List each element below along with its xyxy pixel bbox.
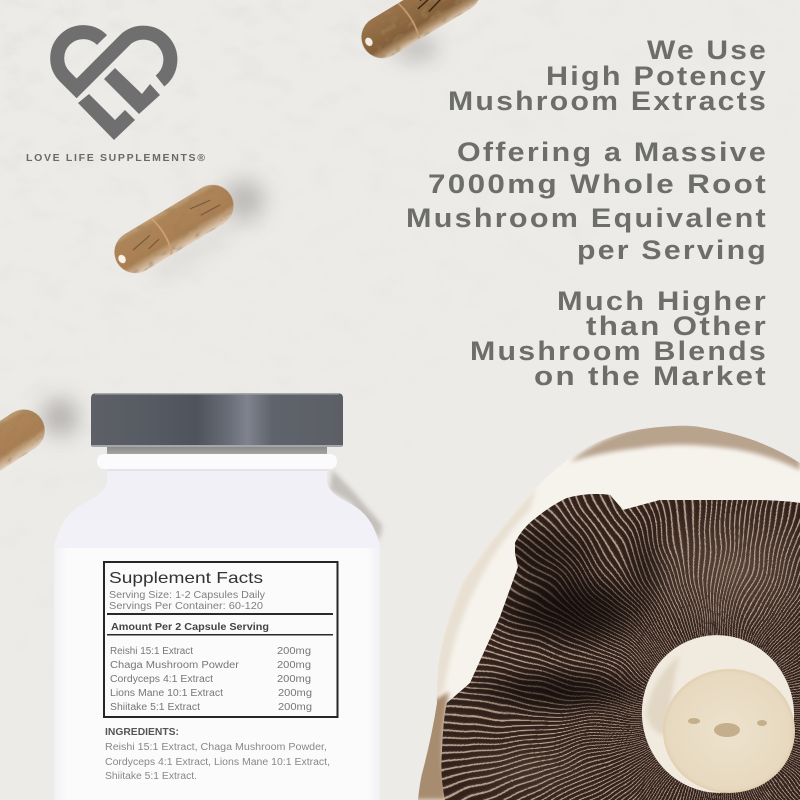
ingredient rows: Lions Mane 10:1 Extract [110,688,223,699]
text block: 7000mg equivalent: Mushroom Equivalent [406,203,768,233]
mushroom [418,426,800,800]
ingredients text: Reishi 15:1 Extract, Chaga Mushroom Powder, [105,742,327,753]
logo mark: heart [57,32,170,140]
text block: higher than others: Much Higher [557,286,768,316]
bottle label [54,548,380,800]
text block: higher than others: on the Market [534,361,768,391]
ingredient rows: 200mg [277,646,311,657]
ingredient rows: Shiitake 5:1 Extract [110,702,200,713]
ingredients text: Cordyceps 4:1 Extract, Lions Mane 10:1 Extract, [105,757,330,768]
ingredient rows: 200mg [278,688,312,699]
stem marks [688,718,767,737]
text block: 7000mg equivalent: Offering a Massive [457,137,768,167]
text block: high potency [448,35,768,116]
serving info: Serving Size: 1-2 Capsules Daily [109,590,265,601]
text block: 7000mg equivalent: per Serving [577,235,768,265]
text block: higher than others: Mushroom Blends [470,336,768,366]
mushroom cap [418,426,800,800]
bottle body [54,468,380,800]
text block: 7000mg equivalent: 7000mg Whole Root [428,169,768,199]
ingredients text: Shiitake 5:1 Extract. [105,771,197,782]
mushroom gills [441,494,800,800]
bottle collar [107,447,327,454]
ingredient rows: 200mg [277,660,311,671]
bottle neck ring [97,454,337,469]
ingredients text: INGREDIENTS: [105,727,179,738]
supplement facts panel [104,562,338,717]
ingredient rows: Chaga Mushroom Powder [110,660,240,671]
bottle cap [91,394,343,447]
ingredients text [105,727,330,782]
text block: high potency: Mushroom Extracts [448,86,768,116]
text block: higher than others [470,286,768,391]
logo wordmark: LOVE LIFE SUPPLEMENTS® [26,152,205,164]
text block: high potency: We Use [647,35,768,65]
capsule shadows [42,38,438,435]
text block: high potency: High Potency [546,61,768,91]
bottle shadow [330,470,382,540]
supplement facts heading: Supplement Facts [109,570,263,587]
ingredient rows: 200mg [277,674,311,685]
capsule: centre [107,177,241,281]
text block: higher than others: than Other [586,311,768,341]
ingredient rows [110,646,312,713]
ingredient rows: 200mg [278,702,312,713]
text block: 7000mg equivalent [406,137,768,265]
serving info [109,590,265,612]
amount per serving: Amount Per 2 Capsule Serving [111,622,269,633]
capsule: top [354,0,488,66]
capsule: left [0,401,53,509]
serving info: Servings Per Container: 60-120 [109,601,263,612]
ingredient rows: Cordyceps 4:1 Extract [110,674,213,685]
ingredient rows: Reishi 15:1 Extract [110,646,193,657]
